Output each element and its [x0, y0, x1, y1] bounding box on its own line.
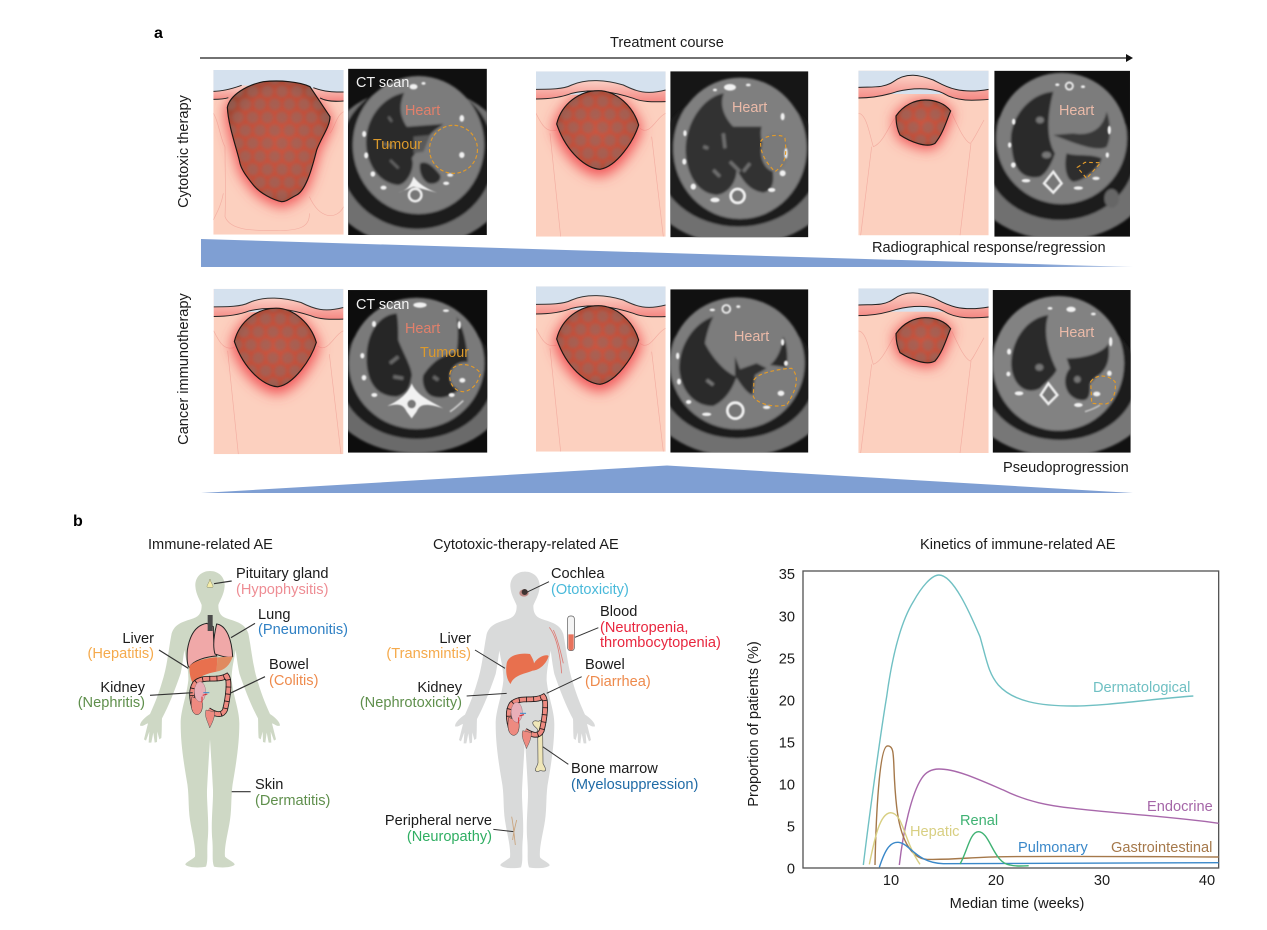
y-axis tick labels — [779, 567, 795, 878]
label: CT scan 6 heart: Heart — [1059, 325, 1094, 341]
series label: gastrointestinal: Gastrointestinal — [1111, 840, 1212, 856]
label: CT scan 4 annotations — [356, 297, 469, 361]
series label: renal: Renal — [960, 813, 998, 829]
label: pituitary gland — [236, 566, 328, 598]
panel: CT scan 5 — [670, 289, 808, 453]
panel: CT scan 3 — [994, 70, 1130, 237]
panel: cytotoxic-therapy-related AE — [360, 537, 721, 868]
label: bowel: (Diarrhea) — [585, 674, 651, 690]
label: bone marrow — [571, 761, 698, 793]
y-axis tick labels: 25 — [779, 652, 795, 668]
chart frame and curves — [803, 571, 1219, 868]
label: blood: (Neutropenia, — [600, 620, 688, 636]
label: cochlea: (Ototoxicity) — [551, 582, 629, 598]
wedge: decreasing tumour burden — [201, 239, 1133, 267]
panel: cytotoxic tumour illustration 1 — [213, 70, 344, 235]
label: kidney — [78, 680, 146, 711]
caption: pseudoprogression: Pseudoprogression — [1003, 460, 1129, 476]
label: peripheral nerve: Peripheral nerve — [385, 813, 492, 829]
y-axis tick labels: 20 — [779, 694, 795, 710]
caption: radiographical response: Radiographical response/regression — [872, 240, 1106, 256]
label: peripheral nerve: (Neuropathy) — [407, 829, 492, 845]
label: CT scan 4 annotations: Tumour — [420, 345, 469, 361]
x-axis tick labels — [883, 873, 1215, 889]
label: liver: (Transmintis) — [386, 646, 471, 662]
panel: kinetics chart — [746, 537, 1219, 912]
y-axis title: Proportion of patients (%) — [746, 641, 762, 807]
y-axis tick labels: 35 — [779, 567, 795, 583]
label: kidney: (Nephrotoxicity) — [360, 695, 462, 711]
label: skin: Skin — [255, 777, 283, 793]
label: bowel — [585, 657, 651, 690]
panel a heading: a — [154, 25, 163, 42]
panel: immunotherapy tumour illustration 2 — [536, 286, 666, 452]
label: liver — [386, 631, 471, 662]
label: CT scan 3 heart: Heart — [1059, 103, 1094, 119]
label: CT scan 1 annotations: CT scan — [356, 75, 409, 91]
heading: immune-related AE: Immune-related AE — [148, 537, 273, 553]
label: bone marrow: Bone marrow — [571, 761, 658, 777]
label: skin: (Dermatitis) — [255, 793, 330, 809]
label: CT scan 1 annotations: Tumour — [373, 137, 422, 153]
label: bone marrow: (Myelosuppression) — [571, 777, 698, 793]
x-axis tick labels: 20 — [988, 873, 1004, 889]
label: liver — [88, 631, 154, 662]
label: pituitary gland: Pituitary gland — [236, 566, 328, 582]
label: lung — [258, 607, 348, 638]
label: blood: Blood — [600, 604, 637, 620]
label: cochlea — [551, 566, 629, 598]
label: liver: Liver — [122, 631, 154, 647]
label: CT scan 1 annotations — [356, 75, 440, 153]
label: lung: Lung — [258, 607, 290, 623]
label: bowel: (Colitis) — [269, 673, 318, 689]
label: CT scan 1 annotations: Heart — [405, 103, 440, 119]
label: peripheral nerve — [385, 813, 492, 845]
label: liver: (Hepatitis) — [88, 646, 154, 662]
label: CT scan 5 heart: Heart — [734, 329, 769, 345]
panel: immunotherapy tumour illustration 1 — [214, 289, 343, 454]
y-axis tick labels: 30 — [779, 610, 795, 626]
figure: human body with organs — [455, 572, 598, 868]
series label: dermatological: Dermatological — [1093, 680, 1190, 696]
figure: human body with organs — [140, 571, 280, 867]
label: bowel: Bowel — [269, 657, 309, 673]
panel: CT scan 6 — [992, 290, 1131, 453]
label: kidney — [360, 680, 463, 711]
x-axis title: Median time (weeks) — [950, 896, 1084, 912]
label: kidney: (Nephritis) — [78, 695, 145, 711]
panel b heading: b — [73, 513, 83, 530]
label: cochlea: Cochlea — [551, 566, 605, 582]
wedge: pseudoprogression burden — [201, 466, 1133, 493]
y-axis tick labels: 10 — [779, 778, 795, 794]
label: CT scan 4 annotations: CT scan — [356, 297, 409, 313]
label: lung: (Pneumonitis) — [258, 622, 348, 638]
x-axis tick labels: 10 — [883, 873, 899, 889]
heading: kinetics of immune-related AE: Kinetics of immune-related AE — [920, 537, 1116, 553]
y-axis tick labels: 5 — [787, 820, 795, 836]
panel: immunotherapy tumour illustration 3 — [858, 288, 989, 453]
label: kidney: Kidney — [100, 680, 146, 696]
label: blood: thrombocytopenia) — [600, 635, 721, 651]
panel: cytotoxic tumour illustration 2 — [536, 71, 666, 237]
label: CT scan 4 annotations: Heart — [405, 321, 440, 337]
y-axis tick labels: 15 — [779, 736, 795, 752]
series label: pulmonary: Pulmonary — [1018, 840, 1088, 856]
row label: cancer immunotherapy: Cancer immunotherapy — [176, 292, 192, 445]
title: treatment course: Treatment course — [610, 35, 724, 51]
panel: cytotoxic tumour illustration 3 — [858, 71, 989, 235]
arrow: treatment course — [200, 54, 1133, 62]
x-axis tick labels: 30 — [1094, 873, 1110, 889]
x-axis tick labels: 40 — [1199, 873, 1215, 889]
label: liver: Liver — [439, 631, 471, 647]
heading: cytotoxic-therapy-related AE: Cytotoxic-therapy-related AE — [433, 537, 619, 553]
panel: CT scan 1 — [348, 68, 487, 235]
y-axis tick labels: 0 — [787, 862, 795, 878]
label: bowel: Bowel — [585, 657, 625, 673]
panel: CT scan 2 — [670, 71, 808, 238]
label: bowel — [269, 657, 318, 689]
label: pituitary gland: (Hypophysitis) — [236, 582, 328, 598]
series label: hepatic: Hepatic — [910, 824, 959, 840]
panel: immune-related AE — [78, 537, 348, 867]
label: kidney: Kidney — [417, 680, 463, 696]
label: skin — [255, 777, 330, 809]
label: CT scan 2 heart: Heart — [732, 100, 767, 116]
label: blood — [600, 604, 721, 651]
panel: CT scan 4 — [348, 290, 488, 453]
row label: cytotoxic therapy: Cytotoxic therapy — [176, 94, 192, 208]
series label: endocrine: Endocrine — [1147, 799, 1213, 815]
